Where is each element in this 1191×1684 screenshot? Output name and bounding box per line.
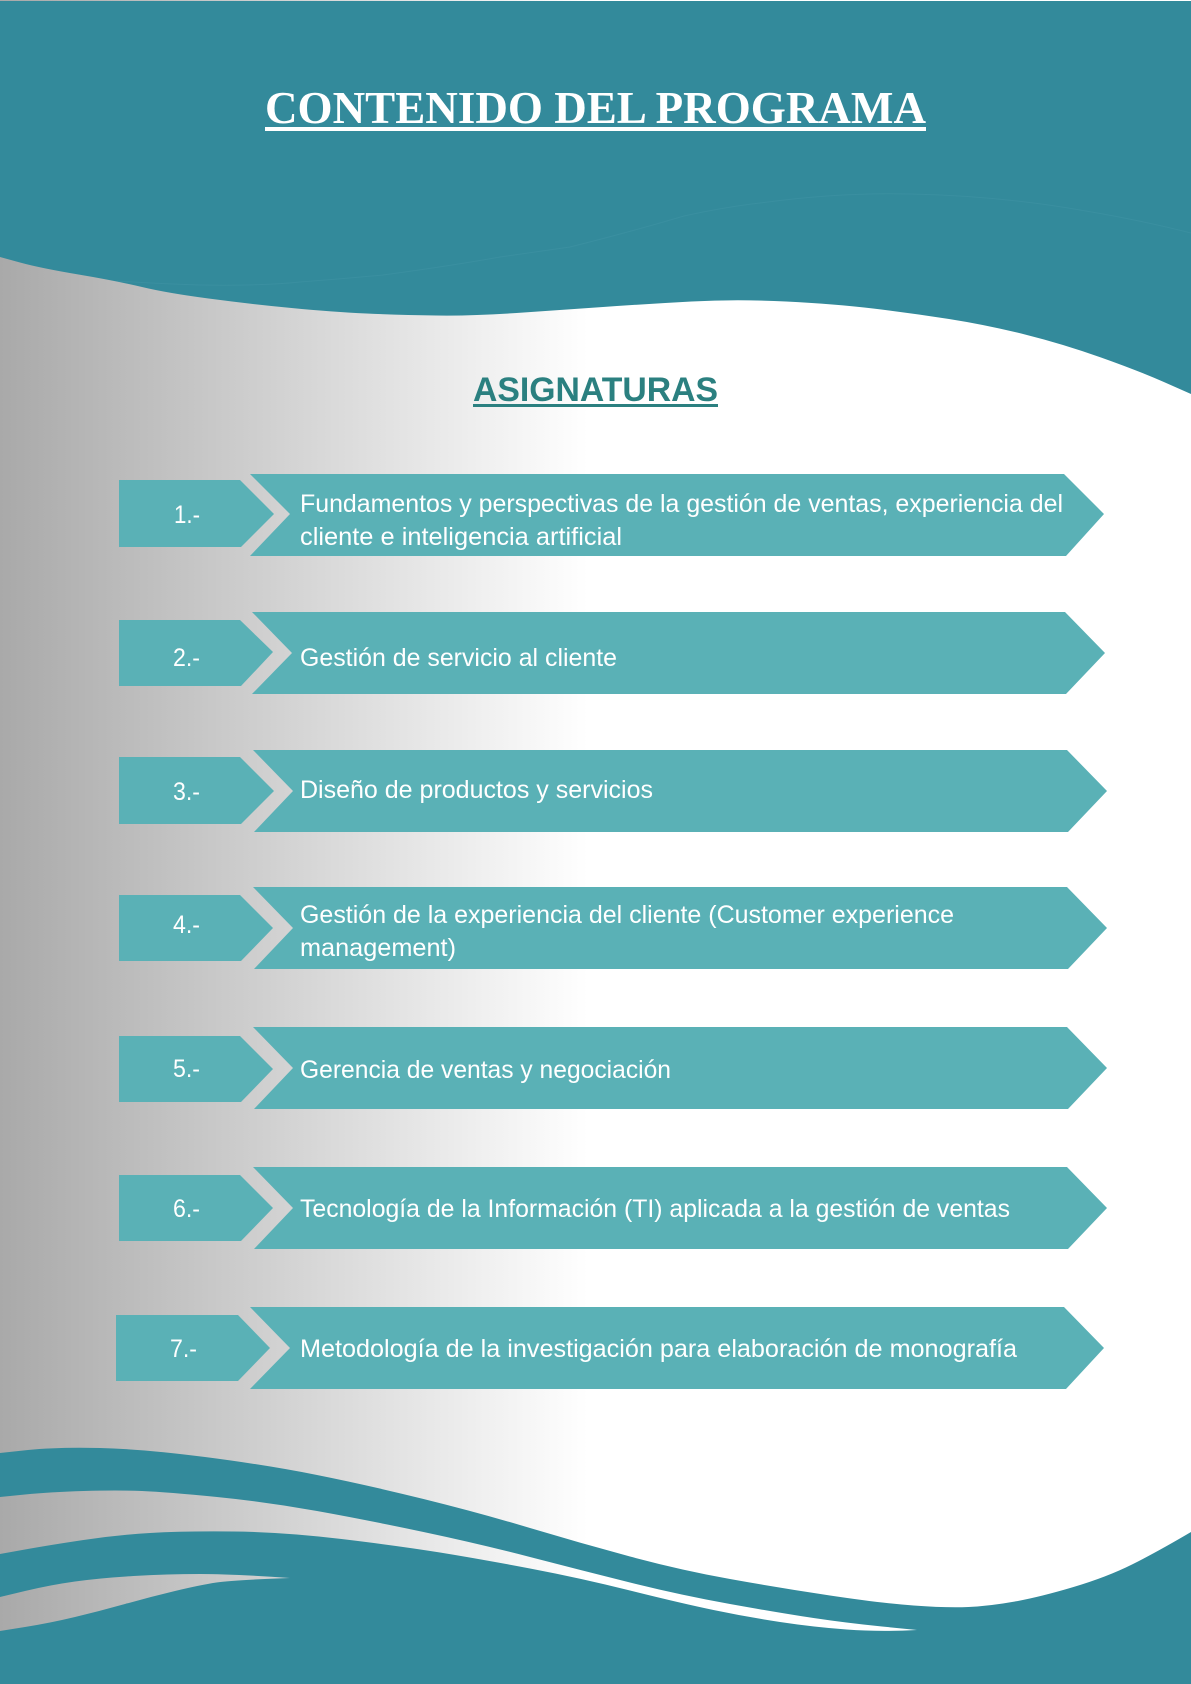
- arrow 4: [253, 887, 1107, 969]
- number tab 1: [119, 480, 274, 547]
- item 3: [119, 750, 1107, 832]
- item 2: [119, 612, 1105, 694]
- item 4: [119, 887, 1107, 969]
- arrow 2: Gestión de servicio al cliente: [300, 644, 617, 672]
- number tab 6: [119, 1175, 273, 1241]
- item 7: [116, 1307, 1104, 1389]
- number tab 7: 7.-: [170, 1335, 197, 1363]
- number tab 6: 6.-: [173, 1195, 200, 1223]
- top wave header: [0, 1, 1191, 394]
- number tab 2: [119, 620, 273, 686]
- number tab 2: 2.-: [173, 644, 200, 672]
- arrow 5: [253, 1027, 1107, 1109]
- arrow 2: [252, 612, 1105, 694]
- number tab 3: 3.-: [173, 778, 200, 806]
- arrow 7: Metodología de la investigación para elaboración de monografía: [300, 1335, 1017, 1363]
- item 5: [119, 1027, 1107, 1109]
- item 6: [119, 1167, 1107, 1249]
- arrow 5: Gerencia de ventas y negociación: [300, 1056, 671, 1084]
- arrow 6: [253, 1167, 1107, 1249]
- arrow 4: Gestión de la experiencia del cliente (Customer experience: [300, 901, 954, 929]
- arrow 4: management): [300, 934, 456, 962]
- heading: asignaturas: ASIGNATURAS: [473, 371, 718, 409]
- arrow 1: cliente e inteligencia artificial: [300, 523, 622, 551]
- arrow 3: Diseño de productos y servicios: [300, 776, 653, 804]
- arrow 6: Tecnología de la Información (TI) aplicada a la gestión de ventas: [300, 1195, 1010, 1223]
- number tab 5: 5.-: [173, 1055, 200, 1083]
- arrow 3: [253, 750, 1107, 832]
- arrow 7: [250, 1307, 1104, 1389]
- number tab 5: [119, 1036, 273, 1102]
- number tab 7: [116, 1315, 270, 1381]
- title: CONTENIDO DEL PROGRAMA: [265, 82, 926, 133]
- arrow 1: [250, 474, 1104, 556]
- item 1: [119, 474, 1104, 556]
- number tab 1: 1.-: [174, 501, 200, 529]
- number tab 4: [119, 895, 273, 961]
- number tab 3: [119, 757, 274, 824]
- bottom wave footer: [0, 1448, 1191, 1684]
- arrow 1: Fundamentos y perspectivas de la gestión de ventas, experiencia del: [300, 490, 1063, 518]
- number tab 4: 4.-: [173, 911, 200, 939]
